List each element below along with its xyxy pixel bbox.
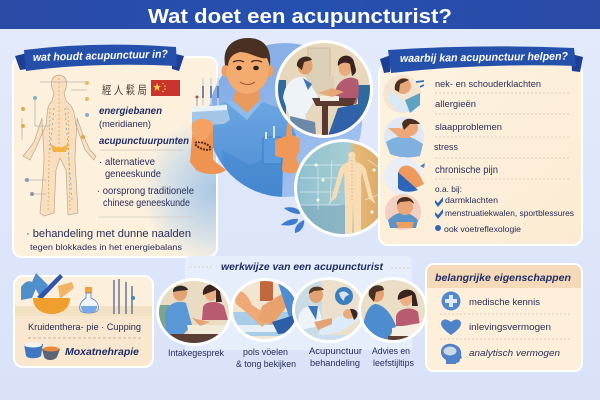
header bar with title: Wat doet een acupuncturist? xyxy=(148,6,452,28)
icon: flask xyxy=(80,287,98,313)
list: complaints: allergieën xyxy=(435,99,476,110)
photo: meridian chart body xyxy=(294,139,378,237)
list: complaints xyxy=(434,79,571,194)
text: moxatherapie: Moxatnehrapie xyxy=(65,347,139,358)
list: complaints: o.a. bij: xyxy=(435,184,462,194)
icon: head with brain xyxy=(441,344,462,364)
step: intakegesprek xyxy=(156,278,232,346)
icon: medical cross xyxy=(442,292,460,310)
panel: aanvullende therapieën xyxy=(14,273,153,367)
step: pols voelen xyxy=(230,278,300,342)
text: oorsprong traditionele chinese geneeskunde xyxy=(97,186,194,217)
icon: needles xyxy=(114,279,135,314)
body chart with meridians xyxy=(21,75,96,216)
list: conditions with check marks: ook voetreflexologie xyxy=(444,224,521,234)
text: alternatieve geneeskunde: · alternatieve xyxy=(99,157,155,168)
icon: heart xyxy=(441,320,461,335)
list: qualities: analytisch vermogen xyxy=(469,348,560,359)
icon: moxa bowls xyxy=(24,342,60,360)
text: kruidentherapie en cupping: Kruidenthera- pie · Cupping xyxy=(28,322,141,333)
list: qualities: medische kennis xyxy=(469,297,540,308)
labels: process steps: & tong bekijken xyxy=(236,359,296,369)
labels: process steps: Acupunctuur xyxy=(309,346,362,356)
heading: belangrijke eigenschappen: belangrijke eigenschappen xyxy=(435,272,571,284)
central blue disc xyxy=(208,43,362,197)
icon: smiling man xyxy=(385,194,421,230)
scrubs xyxy=(212,102,296,197)
banner: wat houdt acupunctuur in: wat houdt acupunctuur in? xyxy=(33,48,168,64)
banner: waarbij kan acupunctuur helpen xyxy=(380,46,583,73)
panel: werkwijze van een acupuncturist xyxy=(156,256,428,369)
icon: chronic pain xyxy=(384,157,425,195)
labels: process steps: pols vöelen xyxy=(243,347,288,357)
banner: wat houdt acupunctuur in xyxy=(15,45,184,71)
text: behandeling met dunne naalden: tegen blokkades in het energiebalans xyxy=(30,242,182,252)
step: advies en leefstijltips xyxy=(358,277,428,343)
list: complaints: stress xyxy=(434,142,458,153)
list: conditions with check marks: darmklachten xyxy=(445,195,498,205)
acupuncturist figure xyxy=(190,38,300,200)
neck and head xyxy=(222,38,274,113)
list: complaints: slaapproblemen xyxy=(435,122,502,133)
icon: mortar and pestle xyxy=(21,273,74,314)
panel: wat houdt acupunctuur in xyxy=(13,45,217,257)
icon: chinese flag xyxy=(151,80,180,96)
photo: consultation scene xyxy=(275,40,373,138)
text: oorsprong traditionele chinese geneeskunde: chinese geneeskunde xyxy=(103,198,190,209)
list: qualities: inlevingsvermogen xyxy=(469,322,551,333)
icon: blue leaves xyxy=(281,207,304,233)
list: conditions with check marks: menstruatiekwalen, sportblessures xyxy=(445,208,574,218)
header bar with title xyxy=(0,0,600,29)
icon: pocket with pens xyxy=(263,126,282,164)
labels: process steps: behandeling xyxy=(310,358,360,368)
text: alternatieve geneeskunde: geneeskunde xyxy=(105,169,161,180)
icon: sleep problems xyxy=(384,117,424,158)
panel: waarbij kan acupunctuur helpen xyxy=(379,46,583,245)
labels: process steps: leefstijltips xyxy=(373,358,414,368)
thumbs-up hand xyxy=(275,122,300,173)
icon: needle box xyxy=(192,78,230,142)
labels: process steps: Advies en xyxy=(372,346,410,356)
text: energiebanen: (meridianen) xyxy=(99,119,151,130)
text: alternatieve geneeskunde xyxy=(99,157,161,180)
heading: werkwijze: werkwijze van een acupuncturist xyxy=(221,262,384,273)
labels: process steps: Intakegesprek xyxy=(168,348,224,358)
list: qualities xyxy=(440,297,571,359)
list: complaints: chronische pijn xyxy=(435,165,498,176)
panel: belangrijke eigenschappen xyxy=(426,264,582,371)
chinese characters: 經 人 鬏 局 xyxy=(102,83,147,97)
list: conditions with check marks xyxy=(435,195,574,234)
text: behandeling met dunne naalden: · behandeling met dunne naalden xyxy=(26,228,191,240)
step: acupunctuur behandeling xyxy=(292,277,367,343)
labels: process steps xyxy=(168,346,414,369)
text: behandeling met dunne naalden xyxy=(26,228,191,252)
text: oorsprong traditionele chinese geneeskunde: · oorsprong traditionele xyxy=(97,186,194,197)
banner: waarbij kan acupunctuur helpen: waarbij kan acupunctuur helpen? xyxy=(400,51,568,65)
text: acupunctuurpunten: acupunctuurpunten xyxy=(99,136,189,147)
icon: neck pain xyxy=(383,75,424,113)
text: energiebanen xyxy=(99,106,162,130)
text: energiebanen: energiebanen xyxy=(99,106,162,117)
arm holding box xyxy=(190,125,226,174)
list: complaints: nek- en schouderklachten xyxy=(435,79,541,90)
